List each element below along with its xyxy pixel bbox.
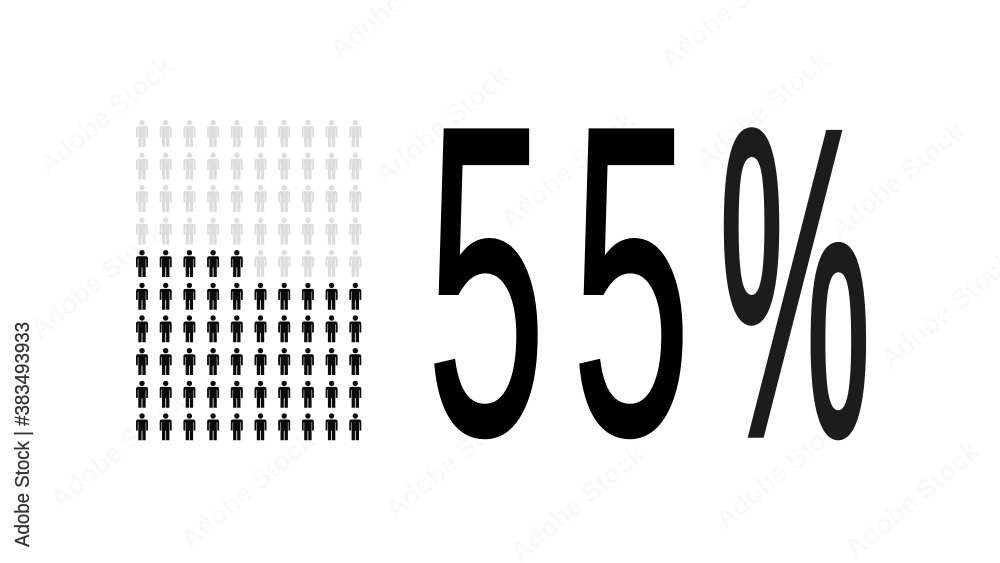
first digit 5: 5 [427,36,546,527]
watermarks: Adobe Stock [175,425,321,555]
pictogram grid: 55 of 100 people [136,120,361,440]
watermarks: Adobe Stock [380,395,526,525]
watermarks: Adobe Stock [45,385,191,515]
watermarks: Adobe Stock [25,215,171,345]
big percentage figure [427,36,871,528]
grey people [136,120,361,277]
vertical stock id caption: Adobe Stock | #383493933 [12,322,34,547]
black people [136,250,361,440]
watermarks: Adobe Stock [690,45,836,175]
watermarks: Adobe Stock [33,50,179,180]
percent sign: % [719,39,871,528]
watermarks: Adobe Stock [825,115,971,245]
watermarks: Adobe Stock [710,405,856,535]
second digit 5: 5 [572,36,691,527]
watermarks: Adobe Stock [840,435,986,563]
watermarks: Adobe Stock [370,60,516,190]
watermarks: Adobe Stock [495,105,641,235]
